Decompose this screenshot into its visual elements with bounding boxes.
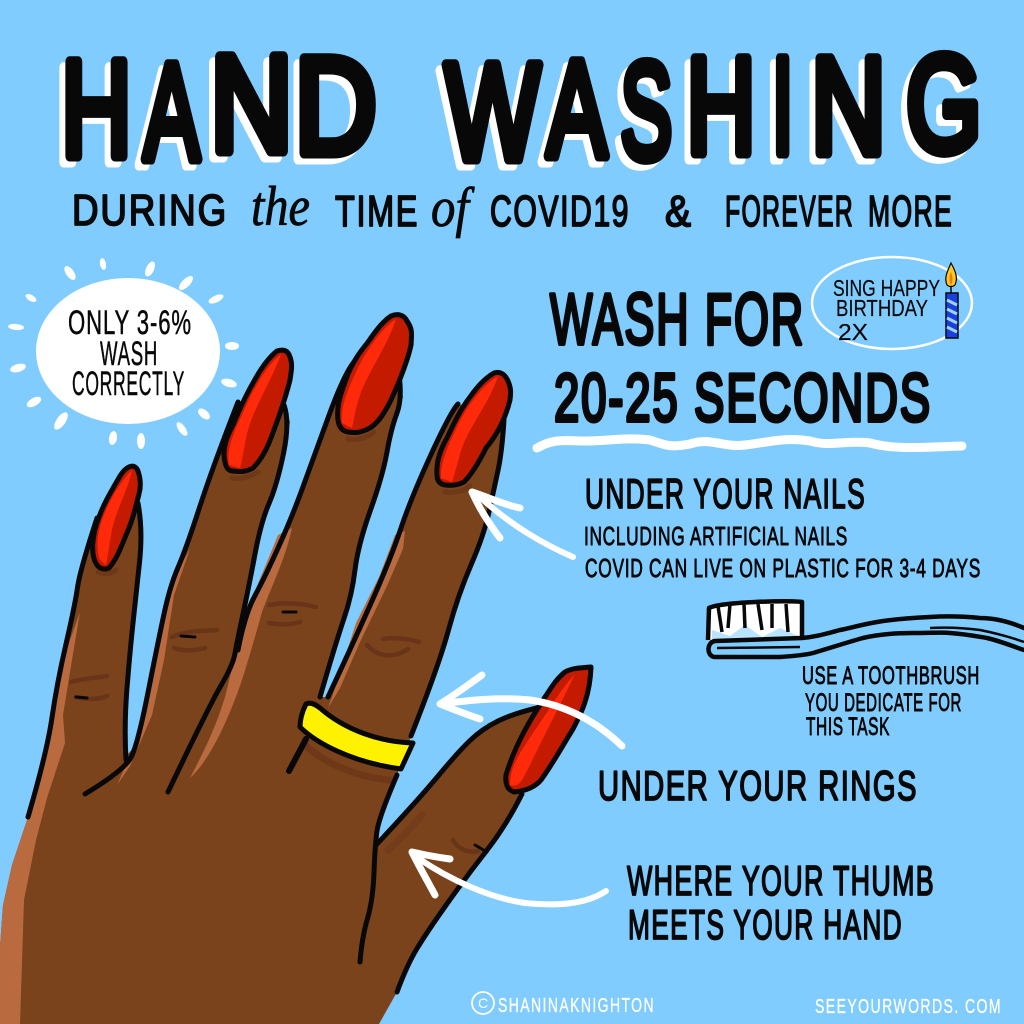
- text: under your nails: [584, 470, 866, 551]
- title: [55, 28, 982, 195]
- title: H: [686, 30, 756, 183]
- title: S: [620, 35, 672, 188]
- title: N: [204, 34, 287, 187]
- nail: index finger: [437, 372, 511, 485]
- heading: wash for: WASH FOR: [550, 280, 805, 360]
- bubble text: WASH: [100, 335, 158, 373]
- note: dedicated toothbrush: THIS TASK: [806, 713, 890, 741]
- bubble text: [68, 304, 192, 403]
- bubble text: CORRECTLY: [72, 365, 185, 403]
- title: A: [547, 33, 607, 186]
- icon: candle: [946, 263, 958, 338]
- text: under your nails: UNDER YOUR NAILS: [585, 470, 866, 517]
- title: A: [138, 42, 194, 195]
- title: H: [61, 33, 132, 186]
- white bubble: [36, 278, 220, 424]
- arrow: rings: [440, 675, 622, 746]
- callout: sing happy birthday: [812, 257, 972, 349]
- subtitle: TIME: [335, 187, 419, 236]
- bubble text: ONLY 3-6%: [68, 304, 192, 342]
- subtitle: the: [251, 176, 310, 238]
- title: A: [144, 36, 200, 189]
- highlight: ring finger: [117, 549, 190, 785]
- callout text: BIRTHDAY: [836, 295, 928, 321]
- subtitle: [72, 176, 953, 239]
- note: dedicated toothbrush: [802, 662, 980, 741]
- credit: artist: [472, 992, 655, 1017]
- hand fill: [0, 362, 570, 1024]
- title: D: [289, 36, 371, 189]
- subtitle: MORE: [868, 187, 953, 236]
- title: S: [614, 41, 666, 194]
- heading: wash for: [550, 280, 932, 436]
- title: I: [772, 30, 794, 183]
- highlight: index finger: [328, 531, 405, 708]
- subtitle: FOREVER: [725, 187, 854, 236]
- sun callout: [8, 258, 239, 449]
- subtitle: COVID19: [490, 187, 630, 236]
- title: G: [906, 28, 982, 181]
- title: H: [680, 36, 750, 189]
- nail: pinky: [93, 466, 140, 569]
- title: N: [210, 28, 293, 181]
- arrow: thumb: [412, 852, 606, 904]
- nail: ring finger: [224, 350, 292, 472]
- nail: thumb: [506, 667, 591, 792]
- ring: [300, 703, 413, 769]
- callout text: [833, 275, 940, 345]
- knuckle marks: [76, 612, 487, 852]
- highlight: middle finger: [190, 528, 292, 778]
- knuckle creases: [71, 603, 478, 852]
- title: G: [900, 34, 976, 187]
- wavy underline: [537, 439, 962, 448]
- text: thumb meets hand: [627, 857, 935, 948]
- sun rays: [8, 258, 239, 449]
- shading: [98, 432, 470, 850]
- callout text: 2X: [838, 319, 868, 345]
- title: I: [766, 36, 788, 189]
- callout text: SING HAPPY: [833, 275, 940, 301]
- subtitle: &: [665, 187, 693, 236]
- title: W: [445, 36, 540, 189]
- hand outlines: [28, 362, 545, 992]
- hand illustration: [0, 315, 591, 1024]
- credit: artist: C: [478, 995, 488, 1011]
- nail: middle finger: [338, 315, 412, 433]
- title: W: [439, 42, 534, 195]
- title: N: [805, 36, 880, 189]
- title: N: [811, 30, 886, 183]
- highlight: wrist and pinky: [0, 612, 80, 1024]
- credit: artist: SHANINAKNIGHTON: [498, 995, 655, 1017]
- title: A: [541, 39, 601, 192]
- subtitle: DURING: [72, 186, 228, 235]
- subtitle: of: [431, 177, 475, 239]
- title: D: [295, 30, 377, 183]
- title: H: [55, 39, 126, 192]
- note: artificial nails: INCLUDING ARTIFICIAL NAILS: [584, 521, 848, 551]
- icon: toothbrush: [708, 601, 1024, 657]
- arrow: nails: [472, 492, 573, 557]
